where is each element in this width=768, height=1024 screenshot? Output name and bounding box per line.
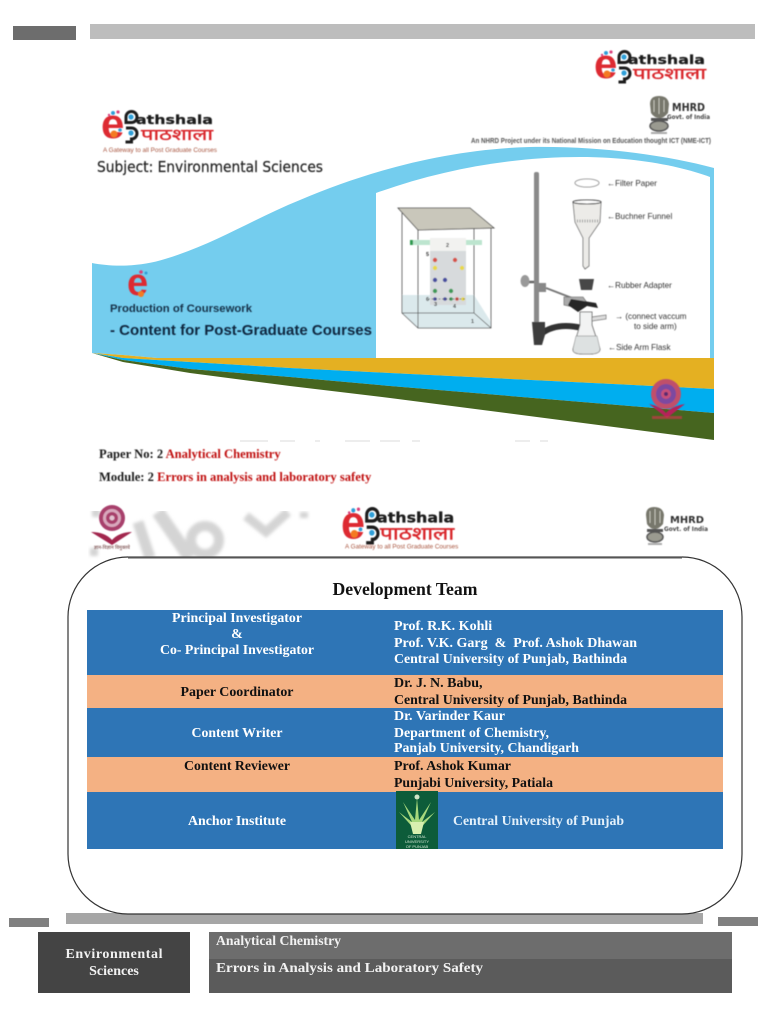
logo: central university of punjab: CENTRAL [408,834,427,839]
heading: Development Team [332,579,478,599]
footer: paper and module box: Analytical Chemistry [216,934,341,949]
logo: UGC header [91,505,132,551]
banner text [110,303,372,339]
faint scan remnants [240,440,548,442]
row: principal investigator: Prof. R.K. Kohli [394,619,492,634]
row: content reviewer: Prof. Ashok Kumar [394,759,511,774]
banner: light blue wave [92,147,714,358]
filter paper [575,179,599,187]
diagram labels: → (connect vaccum [615,312,687,321]
row: paper coordinator [87,675,723,708]
logo: e-Pathshala left [101,100,217,154]
row: paper coordinator: Dr. J. N. Babu, [394,676,483,691]
vacuum filtration diagram [520,172,606,354]
diagram labels [607,179,687,352]
top right header bar [90,24,755,39]
banner: yellow stripe [92,353,714,389]
top left header bar [13,26,76,40]
paper line: Paper No: 2 Analytical Chemistry [99,447,281,461]
subject heading: Subject: Environmental Sciences [97,158,323,176]
logo: e-Pathshala left: पाठशाला [141,127,214,144]
row: content writer [87,708,723,757]
diagram labels: ←Buchner Funnel [607,212,672,221]
row: content writer: Panjab University, Chandigarh [394,741,579,756]
logo: e-Pathshala top right: पाठशाला [633,66,707,83]
panel: development team [68,557,742,914]
logo: UGC wheel in banner [649,379,685,419]
row: content writer: Content Writer [192,726,282,741]
panel outline [68,557,742,914]
logo: e-Pathshala centre header: पाठशाला [380,523,455,544]
logo: e-Pathshala top right [594,40,707,87]
row: content reviewer: Punjabi University, Patiala [394,776,553,791]
bottom right footer bar [718,917,758,926]
row: principal investigator [87,610,723,675]
row: principal investigator: & [231,627,243,642]
logo: e-Pathshala centre header [341,496,458,551]
logo: e-Pathshala centre header: A Gateway to all Post Graduate Courses [345,544,458,551]
row: paper coordinator: Paper Coordinator [180,685,294,700]
footer: subject box: Environmental [66,947,163,962]
logo: MHRD top right: Govt. of India [667,113,710,121]
footer: subject box: Sciences [89,964,139,979]
side arm flask [573,312,600,354]
chromatography tank diagram: 3 [434,302,437,308]
row: content reviewer: Content Reviewer [184,759,290,774]
bottom centre footer bar [66,913,703,924]
logo: MHRD header [646,507,708,545]
diagram labels: ←Side Arm Flask [608,343,671,352]
banner text: - Content for Post-Graduate Courses [110,322,372,339]
logo: e-Pathshala left: A Gateway to all Post Graduate Courses [103,148,217,154]
logo: MHRD top right: An NHRD Project under its National Mission on Education thought ICT (NME-ICT) [471,138,711,145]
row: content reviewer [87,757,723,792]
logo: e-Pathshala top right: e [594,40,617,87]
row: principal investigator: Co- Principal Investigator [160,643,314,658]
icon: national emblem [650,96,669,134]
bottom left footer bar [9,918,49,927]
logo: e-Pathshala left: e [101,100,124,147]
row: anchor institute: Central University of Punjab [453,814,624,829]
row: principal investigator: Principal Investigator [172,611,302,626]
paper and module lines [99,447,372,484]
logo: central university of punjab: UNIVERSITY [405,839,429,844]
logo: e-Pathshala centre header: athshala [377,511,454,527]
logo: MHRD top right: MHRD [672,102,705,114]
ring clamp [541,326,582,334]
diagram labels: ←Rubber Adapter [607,281,672,290]
banner: white picture panel [376,157,710,358]
row: principal investigator: Prof. V.K. Garg & Prof. Ashok Dhawan [394,636,637,651]
footer: subject box [38,932,190,993]
chromatography tank diagram: 2 [446,243,449,249]
logo: MHRD header: Govt. of India [664,526,708,533]
stand rod [534,172,539,327]
panel bottom edge [125,913,685,916]
banner: green stripe [92,353,714,440]
row: anchor institute: Anchor Institute [188,814,286,829]
row: paper coordinator: Central University of Punjab, Bathinda [394,693,627,708]
diagram labels: ←Filter Paper [607,179,657,188]
cover banner [92,147,714,440]
logo: e-Pathshala top right: athshala [628,52,705,67]
funnel [573,202,601,269]
row: content writer: Department of Chemistry, [394,726,549,741]
clamp arm [546,288,572,298]
diagram labels: to side arm) [634,322,677,331]
rubber adapter [579,279,594,290]
footer: paper and module box [209,932,732,993]
banner: blue stripe [92,353,714,413]
watermark smudge [90,512,304,558]
row: principal investigator: Central University of Punjab, Bathinda [394,652,627,667]
logo: e-Pathshala left: athshala [136,112,213,127]
footer: paper and module box: Errors in Analysis and Laboratory Safety [216,961,483,976]
chromatography tank diagram: 4 [453,304,457,310]
banner text: Production of Coursework [110,303,253,315]
logo: central university of punjab: OF PUNJAB [406,844,429,849]
small e logo in banner: e [127,262,148,304]
module line: Module: 2 Errors in analysis and laboratory safety [99,470,372,484]
logo: MHRD header: MHRD [670,515,704,526]
chromatography tank diagram: 6 [426,297,429,303]
chromatography tank diagram: 1 [471,319,474,325]
logo: e-Pathshala centre header: e [341,496,365,549]
logo: UGC header: ज्ञान-विज्ञान विमुक्तये [94,544,130,551]
panel top edge [128,556,682,558]
logo: central university of punjab [396,791,438,849]
logo: MHRD top right [471,96,711,145]
row: content writer: Dr. Varinder Kaur [394,709,505,724]
chromatography tank diagram: 5 [426,252,429,258]
row: anchor institute [87,791,723,849]
chromatography tank diagram [398,208,494,328]
